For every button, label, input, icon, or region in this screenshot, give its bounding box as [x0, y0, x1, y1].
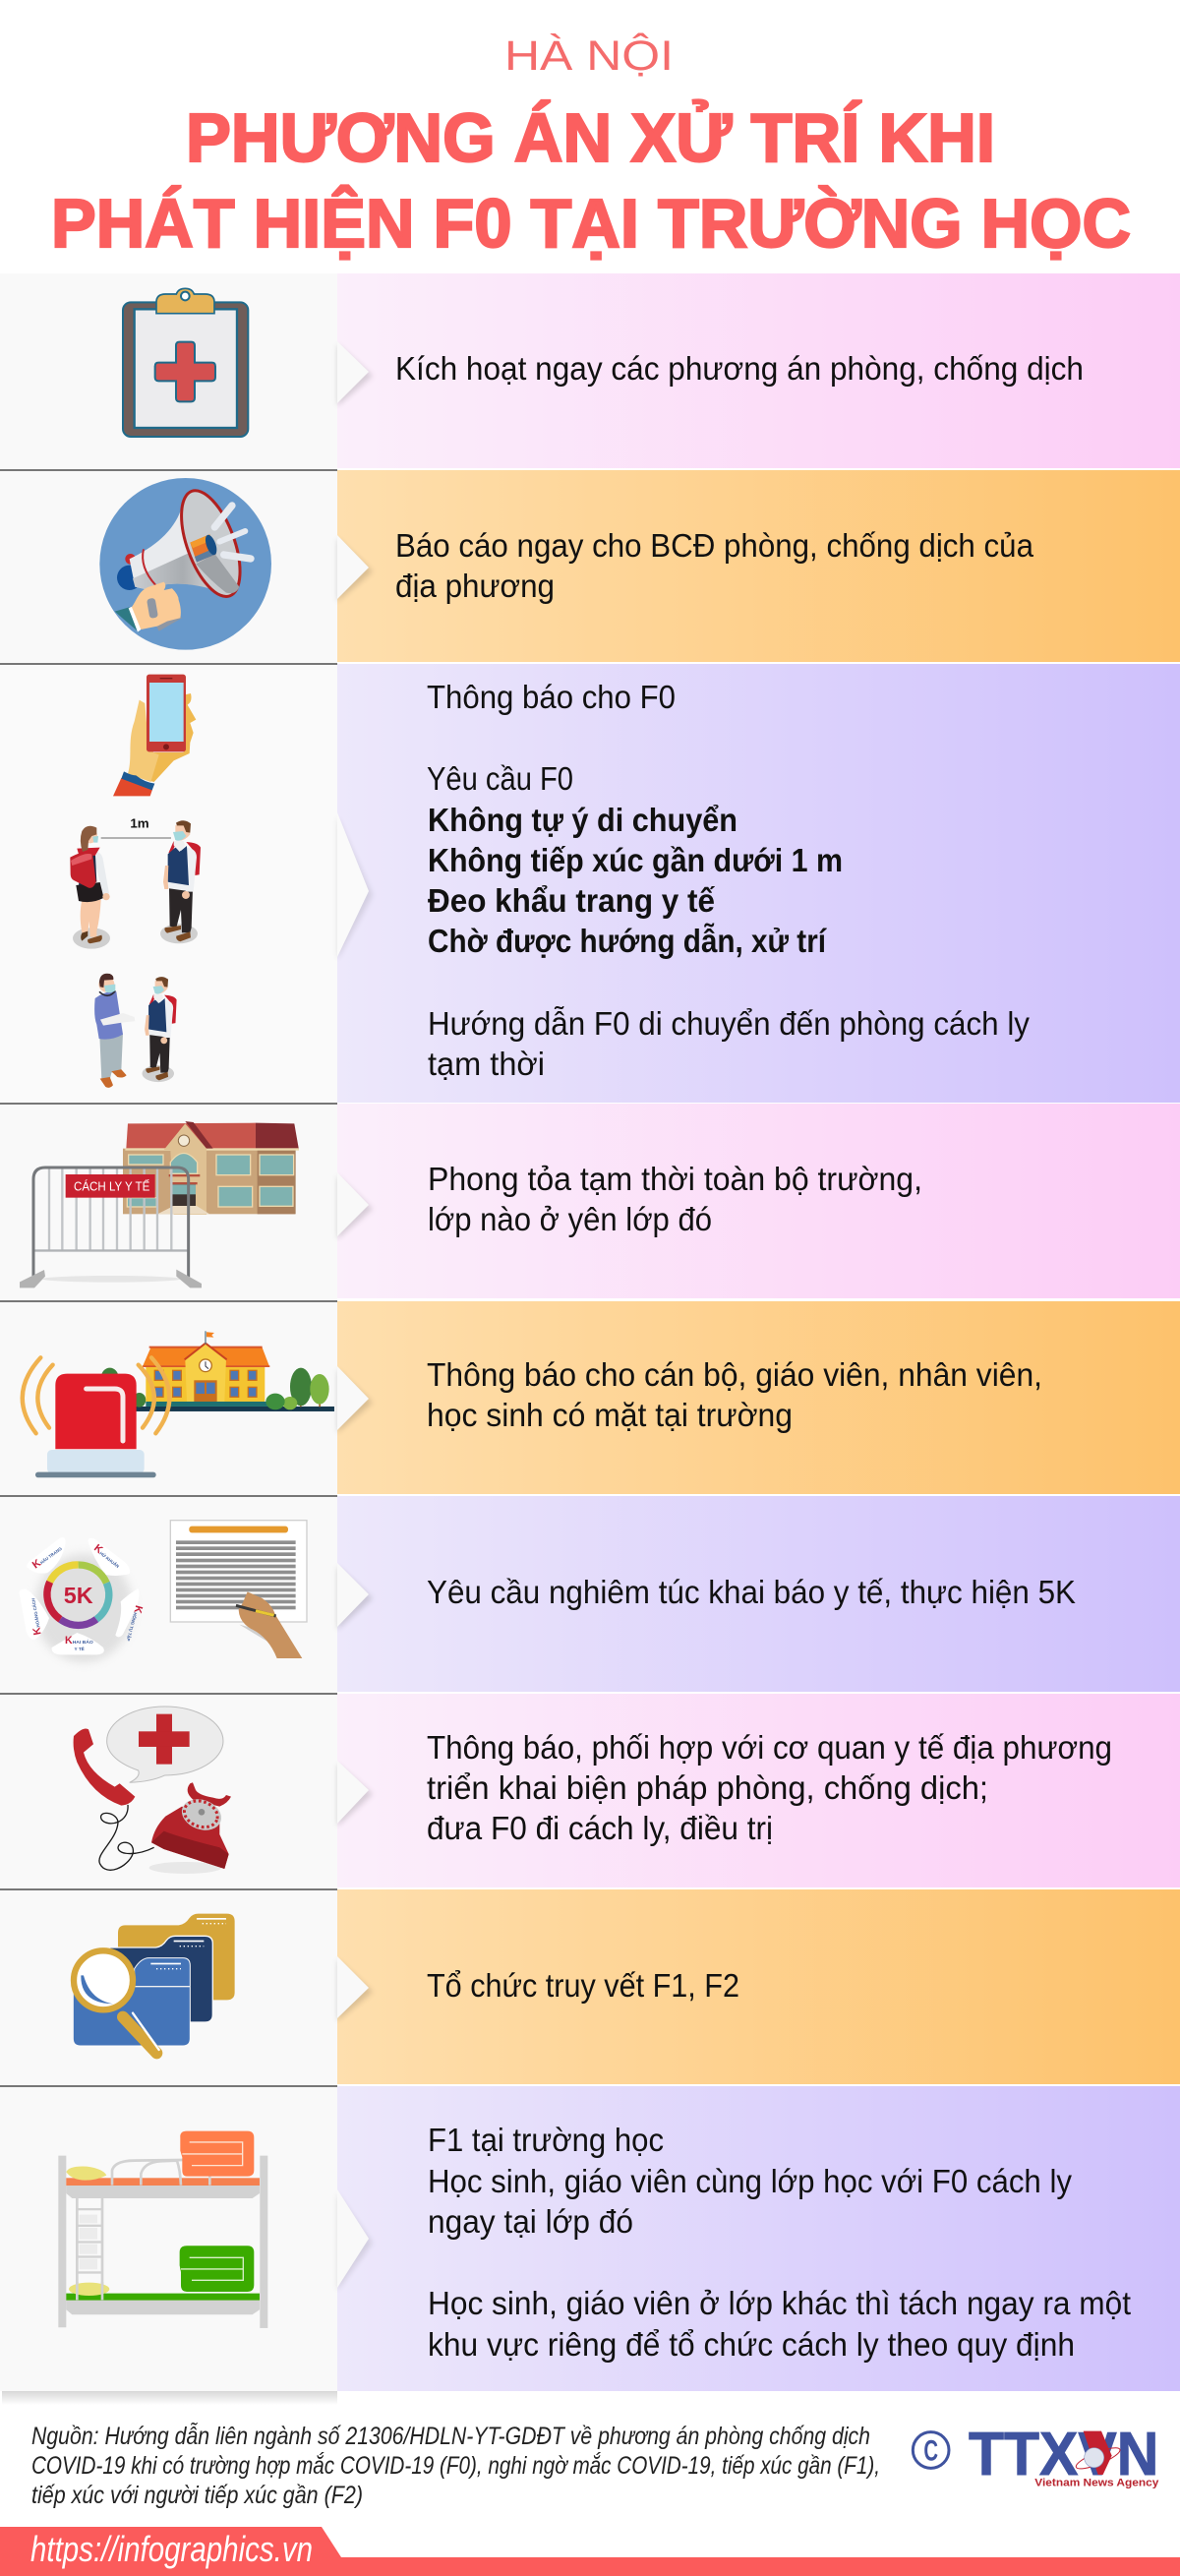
icon: hand holding phone [113, 675, 196, 796]
text: step 7: đưa F0 đi cách ly, điều trị [427, 1810, 773, 1846]
arrow [337, 2189, 369, 2288]
icon: 5K ring with petals [19, 1537, 145, 1662]
text: step 8: Tổ chức truy vết F1, F2 [427, 1967, 739, 2004]
icon: two students standing 1 m apart [70, 815, 201, 949]
source note: COVID-19 khi có trường hợp mắc COVID-19 (F0), nghi ngờ mắc COVID-19, tiếp xúc gần (F1), [31, 2451, 880, 2480]
text: step 4: lớp nào ở yên lớp đó [428, 1201, 712, 1237]
text: step 9: Học sinh, giáo viên cùng lớp học với F0 cách ly [428, 2163, 1072, 2199]
icon: document and hand writing [170, 1521, 307, 1658]
text: step 2: Báo cáo ngay cho BCĐ phòng, chống dịch của [395, 527, 1034, 564]
text: step 3 instructions: Hướng dẫn F0 di chuyển đến phòng cách ly [428, 1005, 1030, 1042]
heading line 1: PHƯƠNG ÁN XỬ TRÍ KHI [186, 98, 995, 176]
text: step 4: Phong tỏa tạm thời toàn bộ trường, [428, 1161, 922, 1197]
icon: 5K ring with petals: 5K [64, 1583, 93, 1608]
icon: school behind medical isolation fence [20, 1121, 299, 1288]
logo: copyright and TTXVN: TTXVN [969, 2421, 1158, 2488]
source note: Nguồn: Hướng dẫn liên ngành số 21306/HDLN-YT-GDĐT về phương án phòng chống dịch [31, 2422, 870, 2450]
text: step 6: Yêu cầu nghiêm túc khai báo y tế, thực hiện 5K [427, 1574, 1076, 1610]
icon: folders and magnifier [73, 1914, 235, 2053]
panel: step 9 F1 isolation [0, 2086, 1180, 2405]
arrow [337, 341, 369, 403]
text: step 9: ngay tại lớp đó [428, 2203, 633, 2240]
arrow [337, 535, 369, 599]
source note [31, 2422, 880, 2509]
text: step 3 instructions: Thông báo cho F0 [427, 679, 676, 715]
text: step 3 instructions: Chờ được hướng dẫn, xử trí [428, 923, 828, 959]
icon: 5K ring with petals: Y TẾ [75, 1646, 85, 1651]
footer bar with website URL [0, 2527, 1180, 2576]
text: step 4 [428, 1161, 922, 1237]
text: step 3 instructions: Yêu cầu F0 [427, 760, 573, 797]
panel: step 8 tracing [0, 1889, 1180, 2087]
text: step 5: Thông báo cho cán bộ, giáo viên, nhân viên, [427, 1356, 1042, 1393]
text: step 9 [428, 2122, 1131, 2363]
title [51, 32, 1131, 262]
icon: megaphone in blue circle [99, 478, 271, 650]
icon: 5K ring with petals: KHAI BÁO [65, 1635, 93, 1647]
logo: copyright and TTXVN: C [923, 2435, 938, 2468]
arrow [337, 1761, 369, 1824]
icon: red telephone with medical speech bubble [74, 1707, 231, 1874]
icon: clipboard with medical cross [123, 288, 248, 437]
panel: step 7 coordinate with health agency [0, 1694, 1180, 1890]
icon: 5K ring with petals: KHOẢNG CÁCH [26, 1597, 44, 1636]
text: step 3 instructions: tạm thời [428, 1046, 545, 1082]
source note: tiếp xúc với người tiếp xúc gần (F2) [31, 2482, 363, 2509]
text: step 3 instructions [427, 679, 1030, 1082]
text: step 3 instructions: Không tự ý di chuyển [428, 802, 738, 838]
text: step 2 [395, 527, 1034, 604]
icon: student with mask (second pair) [143, 977, 177, 1082]
sign: medical isolation [66, 1174, 155, 1198]
text: step 9: khu vực riêng để tổ chức cách ly theo quy định [428, 2326, 1075, 2363]
panel: step 6 medical declaration [0, 1496, 1180, 1695]
text: step 9: Học sinh, giáo viên ở lớp khác thì tách ngay ra một [428, 2285, 1131, 2321]
text: step 3 instructions: Đeo khẩu trang y tế [428, 882, 716, 919]
text: step 7 [427, 1729, 1112, 1846]
panel: step 3 notify F0 [0, 664, 1180, 1105]
text: step 3 instructions: Không tiếp xúc gần dưới 1 m [428, 842, 843, 878]
heading line 2: PHÁT HIỆN F0 TẠI TRƯỜNG HỌC [51, 184, 1131, 262]
text: step 1: Kích hoạt ngay các phương án phòng, chống dịch [395, 350, 1084, 387]
icon: medical staff guiding student [94, 974, 135, 1088]
icon: 5K ring with petals: KHÔNG TỤ TẬP [124, 1604, 145, 1643]
text: step 5 [427, 1356, 1042, 1433]
heading: Hà Nội: HÀ NỘI [504, 32, 674, 80]
icon: 5K ring with petals: KHẨU TRANG [30, 1542, 65, 1571]
text: step 2: địa phương [395, 568, 555, 604]
icon: 5K ring with petals: KHỬ KHUẨN [91, 1542, 123, 1571]
sign: medical isolation: CÁCH LY Y TẾ [74, 1179, 149, 1194]
text: step 7: triển khai biện pháp phòng, chống dịch; [427, 1769, 988, 1806]
panel: step 1 activate plans [0, 273, 1180, 471]
text: step 7: Thông báo, phối hợp với cơ quan y tế địa phương [427, 1729, 1112, 1766]
icon: alarm siren and school [23, 1331, 334, 1477]
panel: step 5 notify school [0, 1301, 1180, 1497]
panel: step 2 report [0, 470, 1180, 665]
arrow [337, 812, 369, 957]
panel: step 4 lockdown [0, 1104, 1180, 1302]
arrow [337, 1172, 369, 1236]
text: step 9: F1 tại trường học [428, 2122, 664, 2158]
arrow [337, 1366, 369, 1430]
label: 1m distance: 1m [130, 815, 149, 830]
logo: copyright and TTXVN: Vietnam News Agency [1034, 2477, 1159, 2488]
text: step 5: học sinh có mặt tại trường [427, 1397, 793, 1433]
icon: bunk bed with blankets [58, 2131, 267, 2328]
footer bar with website URL: https://infographics.vn [30, 2529, 313, 2569]
arrow [337, 1956, 369, 2018]
arrow [337, 1563, 369, 1627]
